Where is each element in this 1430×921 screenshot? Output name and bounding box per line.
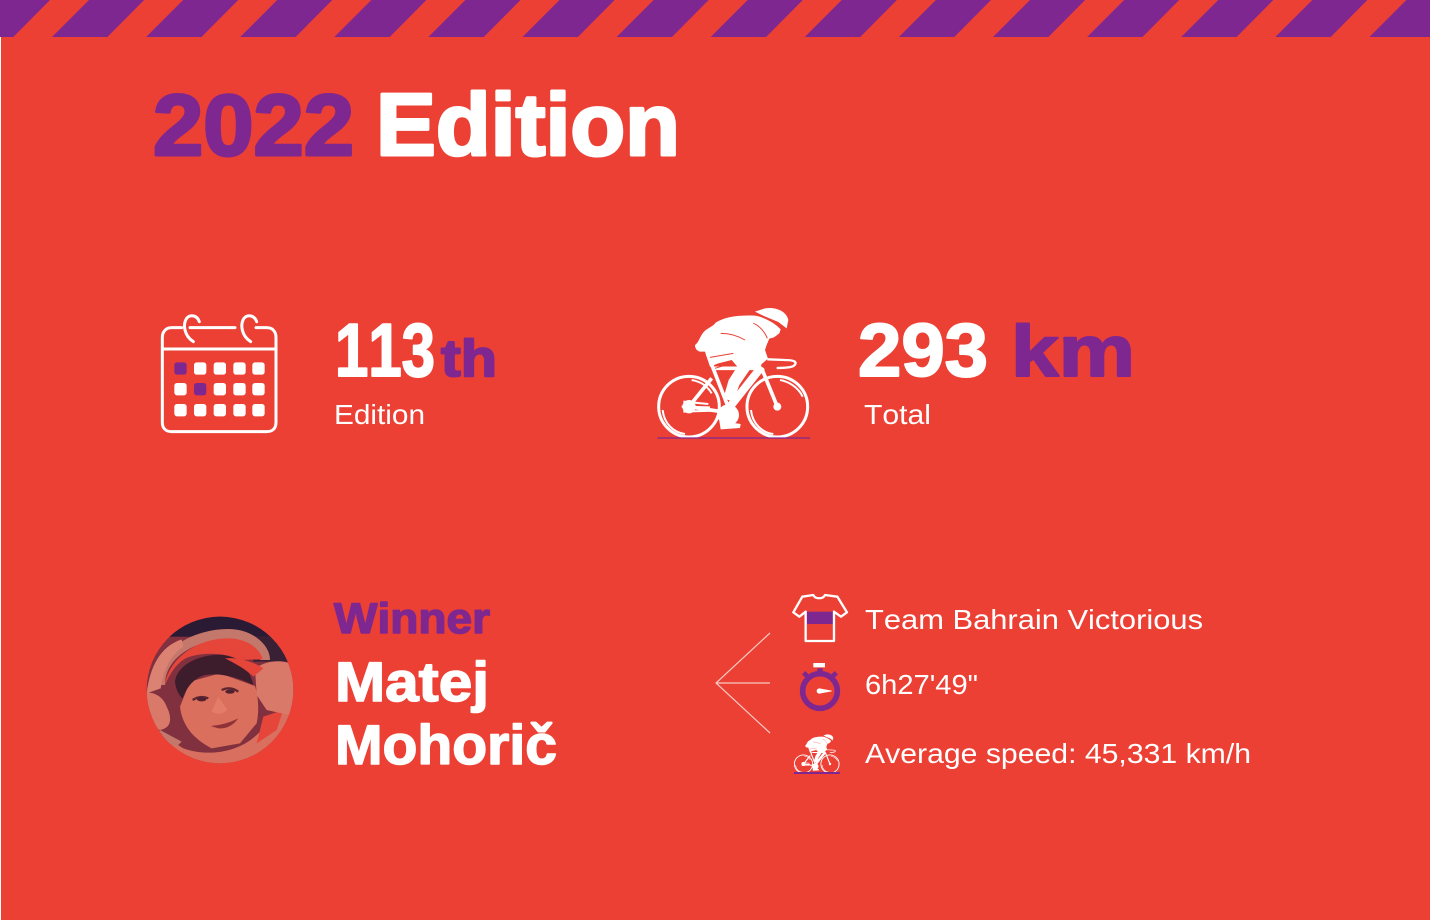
hands	[255, 661, 297, 717]
title	[153, 75, 680, 174]
icon: calendar	[162, 316, 276, 432]
title: Edition	[376, 75, 680, 174]
lower salmon fill	[162, 708, 291, 764]
cap	[175, 655, 253, 698]
face and neck	[180, 673, 258, 748]
stat: 113th edition: 113	[335, 308, 435, 392]
winner name: Mohorič	[335, 713, 557, 776]
icon: small cyclist	[794, 734, 840, 774]
text: time: 6h27'49"	[865, 669, 978, 700]
text: team: Team Bahrain Victorious	[865, 604, 1203, 635]
stat: 293 km total: 293	[858, 308, 988, 392]
stat: 113th edition: th	[441, 330, 497, 388]
winner name	[334, 595, 557, 776]
connector arrow fan	[716, 633, 770, 733]
winner name: Winner	[334, 595, 490, 643]
title: 2022	[153, 78, 354, 174]
winner name: Matej	[335, 650, 489, 713]
stat: 293 km total: Total	[864, 399, 931, 430]
striped top band	[0, 0, 1430, 37]
stat: 293 km total: km	[1011, 312, 1135, 392]
winner photo	[146, 616, 294, 764]
stat: 113th edition: Edition	[334, 399, 425, 430]
icon: cyclist	[657, 308, 810, 438]
icon: jersey	[793, 595, 847, 641]
trophy ring	[160, 634, 265, 685]
stat: 113th edition	[334, 308, 497, 430]
text: average speed: Average speed: 45,331 km/h	[865, 738, 1251, 769]
stat: 293 km total	[858, 308, 1135, 430]
icon: stopwatch	[802, 663, 838, 708]
